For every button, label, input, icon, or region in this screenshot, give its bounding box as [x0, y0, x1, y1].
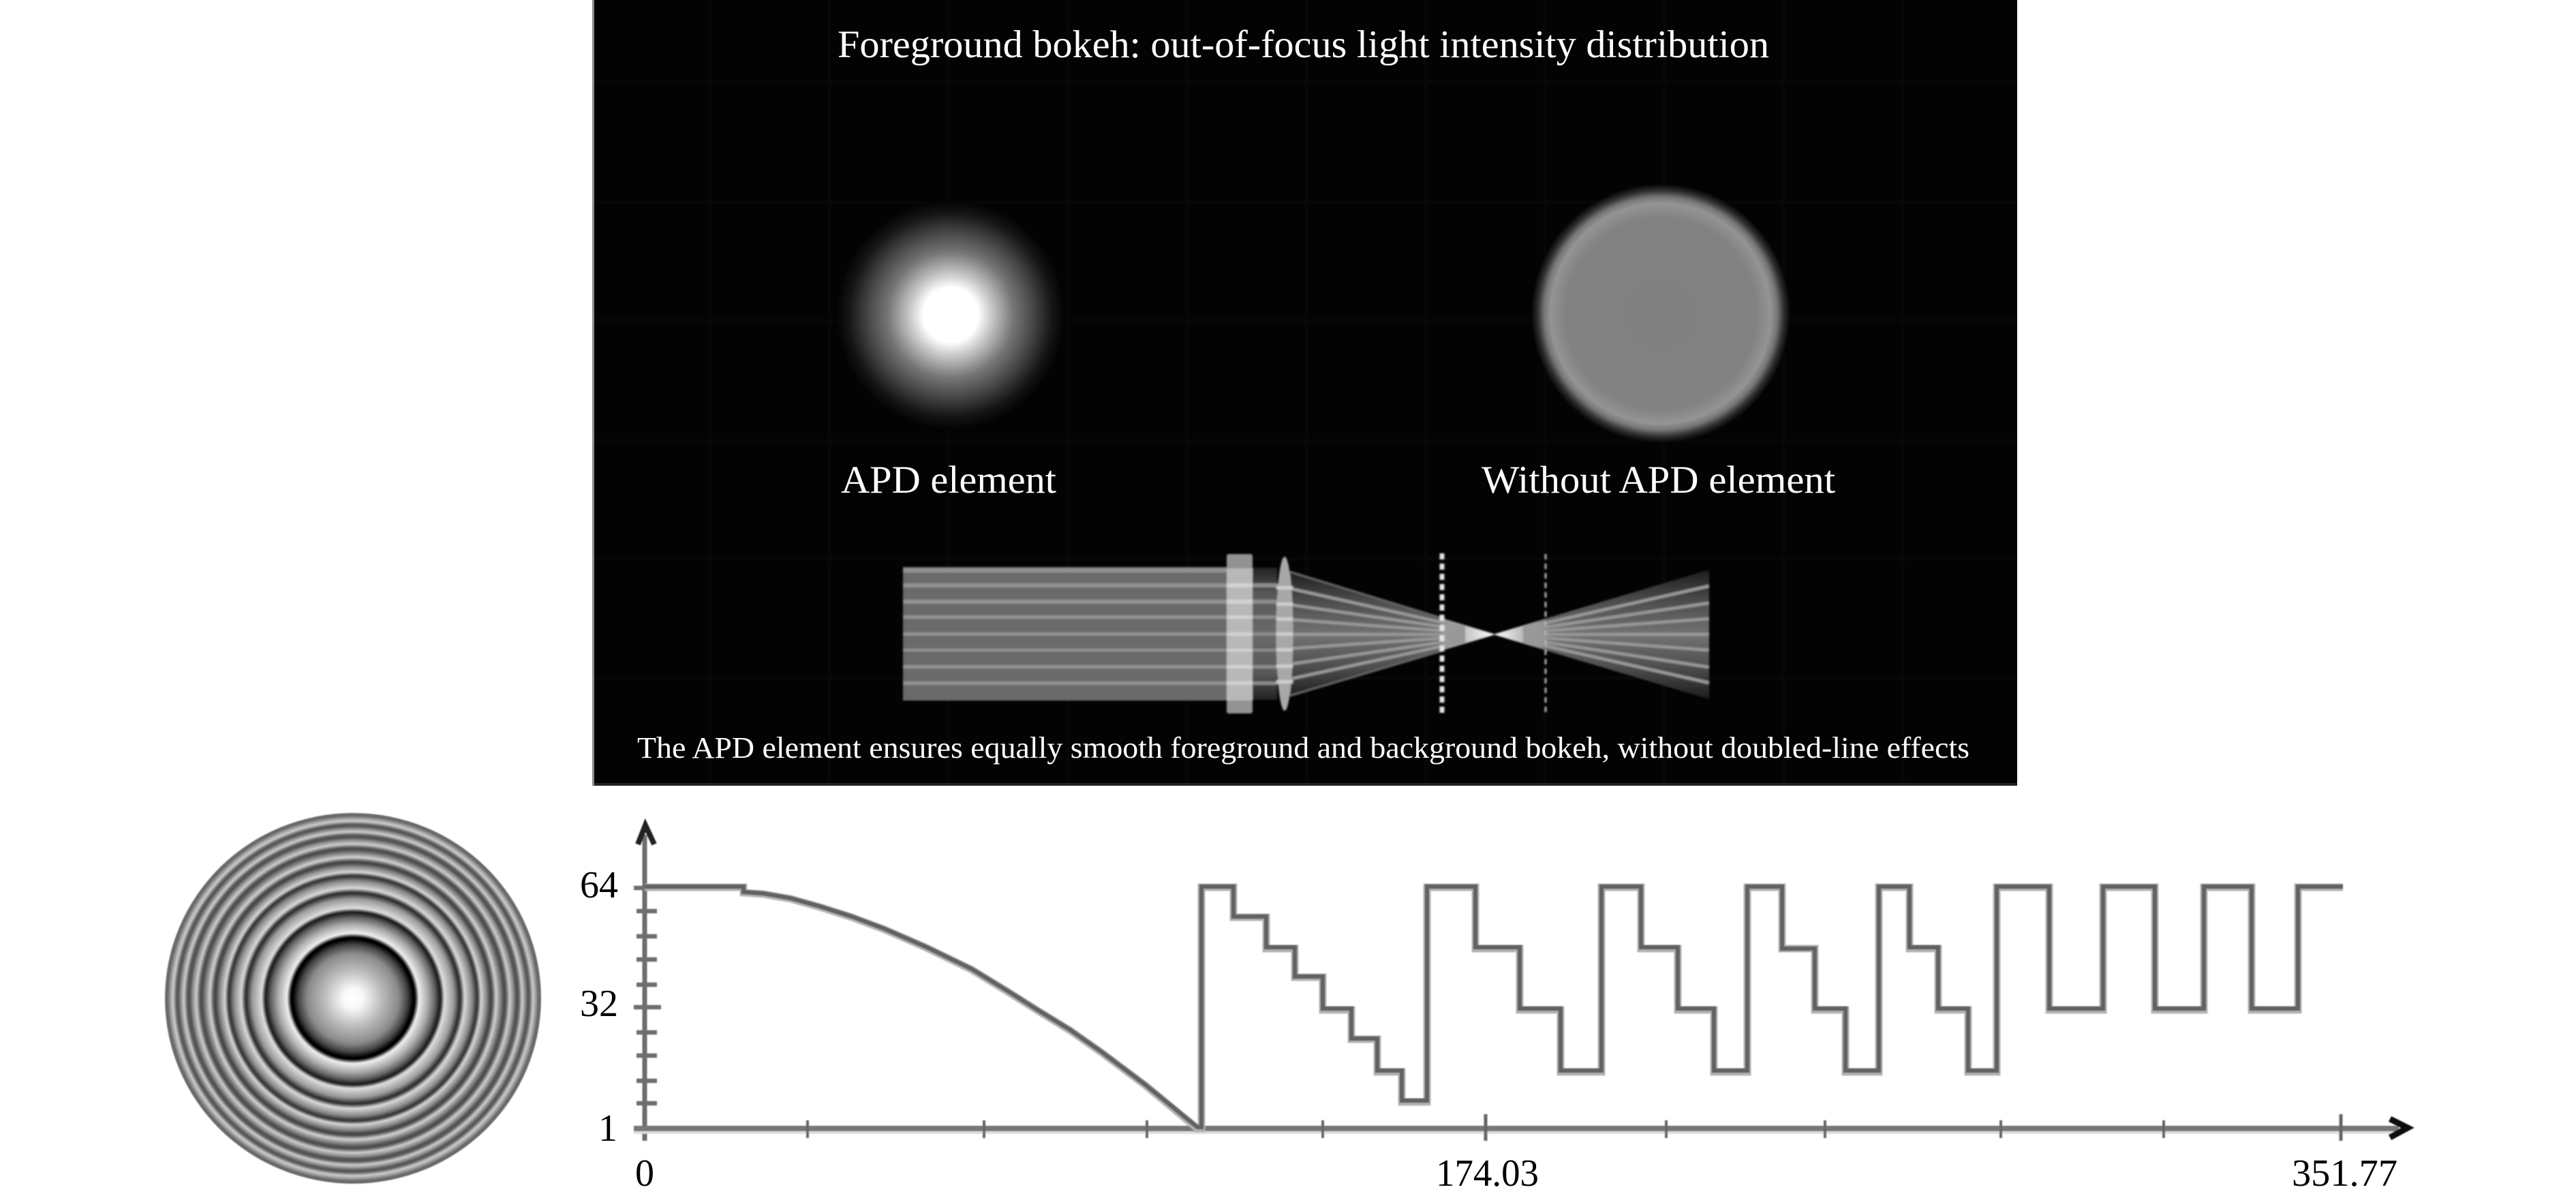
y axis labels: 64	[580, 864, 618, 906]
bokeh spot with APD element	[836, 200, 1065, 429]
label: APD element: APD element	[841, 459, 1056, 502]
phase curve	[645, 887, 2343, 1128]
y axis labels	[580, 864, 618, 1150]
x axis labels: 174.03	[1436, 1152, 1539, 1195]
y axis labels: 32	[580, 983, 618, 1025]
label: without APD element: Without APD element	[1482, 459, 1835, 502]
caption: The APD element ensures equally smooth foreground and background bokeh, without doubled-line effects	[637, 731, 1969, 765]
panel: foreground bokeh	[592, 0, 2017, 786]
y axis labels: 1	[598, 1107, 617, 1150]
step-phase chart	[580, 825, 2408, 1195]
x axis labels	[635, 1152, 2397, 1195]
panel heading: Foreground bokeh: out-of-focus light intensity distribution	[838, 23, 1769, 66]
x axis labels: 351.77	[2292, 1152, 2397, 1195]
optical ray diagram	[903, 553, 1709, 716]
diffractive element ring pattern	[165, 813, 541, 1184]
x axis with ticks	[634, 1114, 2408, 1141]
y axis with ticks	[634, 825, 661, 1141]
bokeh disc without APD element	[1531, 184, 1790, 443]
x axis labels: 0	[635, 1152, 654, 1195]
